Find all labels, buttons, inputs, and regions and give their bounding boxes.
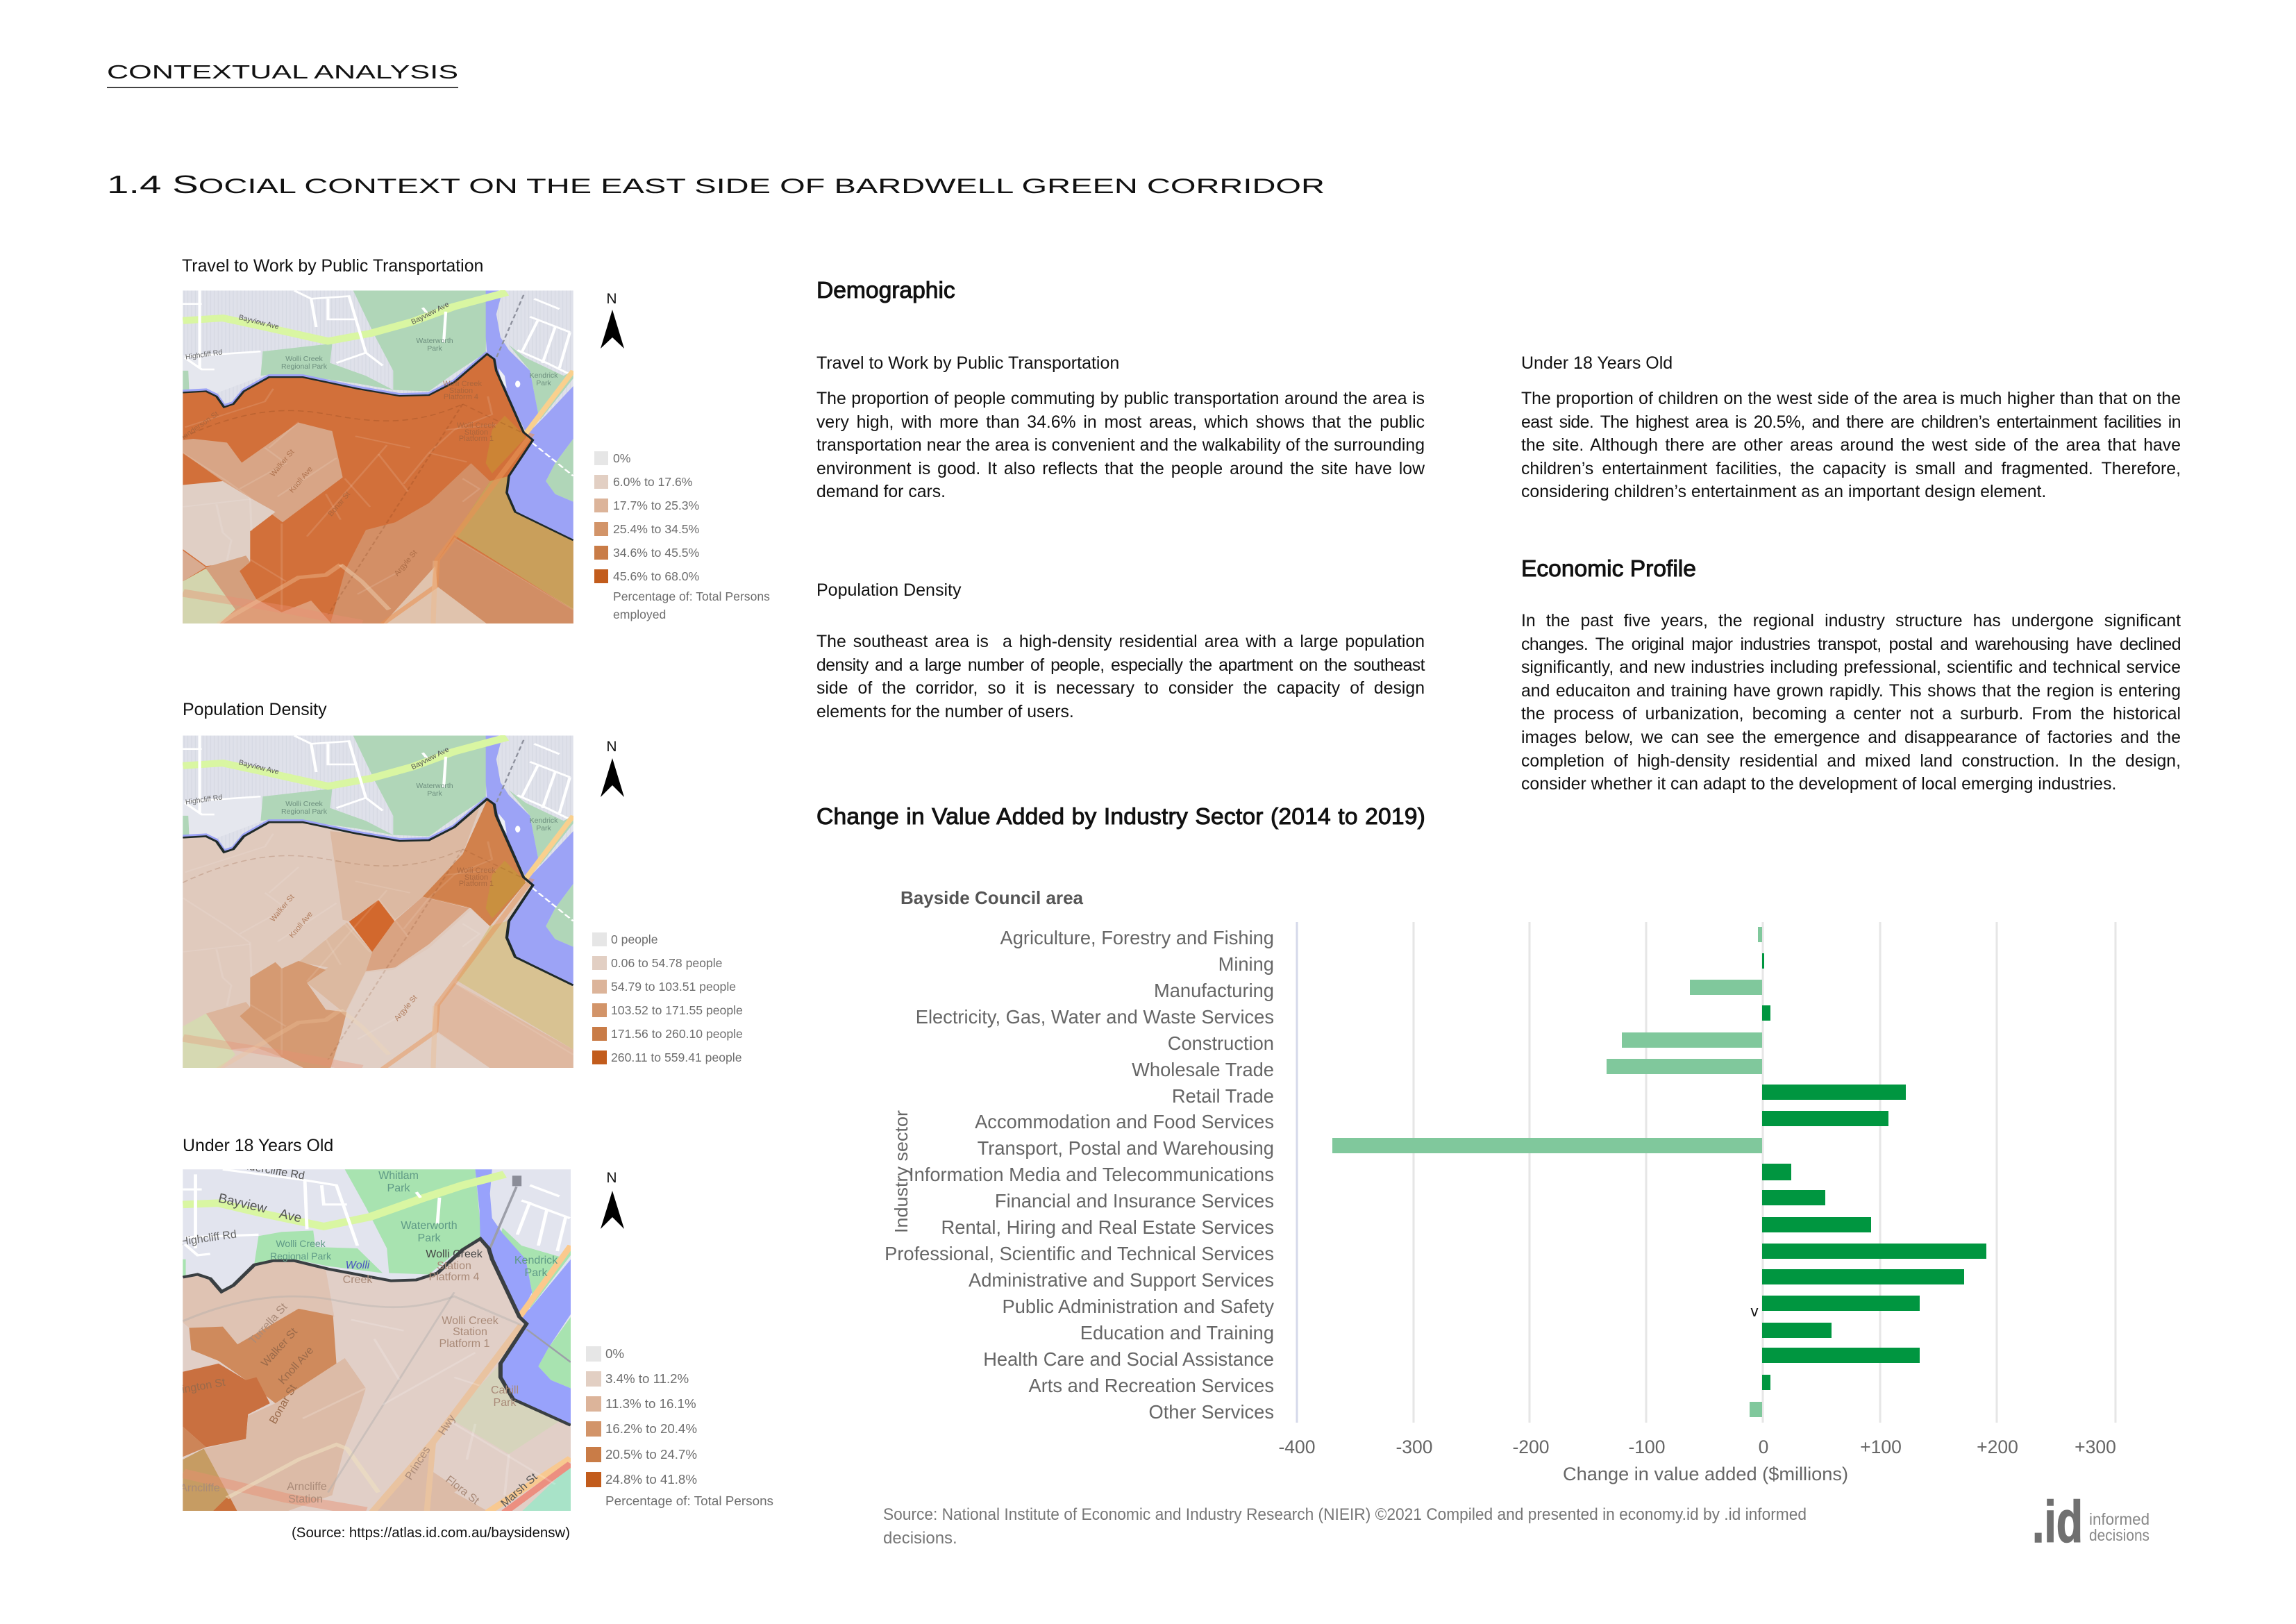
paragraph: economic profile: and educaiton and training have grown rapidly. This shows that the region is entering [1521, 682, 2181, 701]
choropleth map: under 18 years old: Marsh St [499, 1471, 540, 1509]
paragraph: travel to work: demand for cars. [816, 483, 946, 501]
logo: .id informed decisions [2032, 1489, 2150, 1555]
choropleth map: population density: Kendrick [530, 817, 558, 825]
choropleth map: population density [183, 735, 573, 1069]
panel: population density map [183, 700, 743, 1069]
choropleth map: travel to work: Walker St [269, 448, 296, 478]
negative bars [1332, 927, 1762, 1417]
choropleth map: under 18 years old: Regional Park [270, 1250, 332, 1262]
paragraph: travel to work [816, 390, 1425, 501]
choropleth map: under 18 years old: Undercliffe Rd [235, 1158, 305, 1182]
section label: contextual analysis: CONTEXTUAL ANALYSIS [107, 61, 458, 83]
legend: population density: 171.56 to 260.10 people [611, 1027, 743, 1041]
choropleth map: population density: Wolli Creek [457, 867, 496, 875]
choropleth map: travel to work: Platform 1 [459, 435, 494, 443]
paragraph: economic profile: images below, we can see the emergence and disappearance of factories and the [1521, 728, 2181, 747]
choropleth map: under 18 years old: Walker St [259, 1325, 300, 1369]
choropleth map: population density: Bayview Ave [237, 758, 280, 776]
north arrow [601, 739, 624, 797]
choropleth map: under 18 years old: Station [437, 1260, 471, 1272]
choropleth map: under 18 years old: Wolli [346, 1259, 370, 1271]
choropleth map: under 18 years old: Cahill [491, 1384, 519, 1396]
chart source note: decisions. [883, 1529, 957, 1548]
subheading: under 18 years old: Under 18 Years Old [1521, 353, 1673, 373]
north arrow [601, 291, 624, 349]
industry labels: Transport, Postal and Warehousing [978, 1137, 1274, 1159]
positive bars [1762, 953, 1986, 1390]
x axis labels: -300 [1396, 1437, 1433, 1457]
subheading: population density: Population Density [816, 580, 961, 600]
paragraph: population density [816, 633, 1425, 721]
map source note: (Source: https://atlas.id.com.au/baysidensw) [292, 1525, 570, 1541]
choropleth map: under 18 years old: Park [387, 1182, 410, 1194]
x axis labels: +300 [2075, 1437, 2116, 1457]
choropleth map: travel to work: Waterworth [416, 337, 453, 345]
choropleth map: population density: Platform 1 [459, 880, 494, 888]
industry labels: Construction [1168, 1032, 1274, 1054]
industry labels: Other Services [1148, 1401, 1274, 1423]
x axis labels: +100 [1860, 1437, 1902, 1457]
subheading: travel to work: Travel to Work by Public Transportation [816, 353, 1119, 373]
choropleth map: under 18 years old: Wolli Creek [442, 1315, 499, 1327]
paragraph: under 18 years old: considering children’s entertainment as an important design element. [1521, 483, 2046, 501]
choropleth map: under 18 years old [180, 1158, 571, 1512]
choropleth map: under 18 years old: ington St [181, 1377, 226, 1396]
choropleth map: under 18 years old: Waterworth [401, 1220, 458, 1232]
choropleth map: population density: Argyle St [393, 994, 419, 1023]
paragraph: under 18 years old: the site. Although there are other areas around the west side of the area that have [1521, 436, 2181, 455]
chart source note: Source: National Institute of Economic and Industry Research (NIEIR) ©2021 Compiled and presented in economy.id by .id informed [883, 1505, 1807, 1524]
panel: travel to work map [177, 256, 770, 624]
legend: under 18 years old: Percentage of: Total Persons [605, 1493, 773, 1508]
choropleth map: population density: Park [536, 824, 552, 832]
paragraph: economic profile: consider whether it can adapt to the development of local emerging industries. [1521, 775, 2116, 794]
choropleth map: under 18 years old: Arncliffe [287, 1481, 327, 1493]
choropleth map: travel to work: Park [427, 344, 443, 353]
legend: travel to work: 25.4% to 34.5% [613, 522, 700, 536]
stray letter v: v [1751, 1303, 1758, 1320]
legend: under 18 years old: 20.5% to 24.7% [605, 1447, 697, 1462]
legend: travel to work: 34.6% to 45.5% [613, 546, 700, 560]
grid lines [1297, 922, 2115, 1423]
legend: under 18 years old: 16.2% to 20.4% [605, 1421, 697, 1436]
legend: under 18 years old [586, 1346, 773, 1508]
choropleth map: population density: Park [427, 789, 443, 798]
paragraph: travel to work: environment is good. It also reflects that the people around the site have low [816, 460, 1425, 478]
legend: under 18 years old: 0% [605, 1346, 624, 1361]
choropleth map: under 18 years old: Park [525, 1267, 548, 1279]
map heading: population density: Population Density [183, 700, 327, 719]
choropleth map: population density: Regional Park [281, 807, 328, 816]
industry labels: Wholesale Trade [1132, 1059, 1274, 1080]
industry labels: Mining [1218, 953, 1274, 975]
industry labels: Arts and Recreation Services [1029, 1375, 1274, 1396]
choropleth map: travel to work: Henderson St [177, 410, 220, 444]
heading: economic profile: Economic Profile [1521, 556, 1696, 582]
industry labels: Administrative and Support Services [969, 1269, 1274, 1291]
paragraph: population density: The southeast area is a high-density residential area with a large population [816, 633, 1425, 651]
choropleth map: under 18 years old: Platform 1 [439, 1338, 490, 1350]
choropleth map: under 18 years old: Creek [343, 1274, 373, 1286]
choropleth map: under 18 years old: Flora St [443, 1474, 482, 1507]
industry labels: Manufacturing [1154, 980, 1274, 1001]
choropleth map: under 18 years old: Bonar St [267, 1382, 299, 1426]
logo: .id informed decisions: decisions [2089, 1526, 2150, 1544]
choropleth map: travel to work: Highcliff Rd [185, 348, 223, 362]
industry labels [885, 927, 1274, 1423]
legend: population density: 0.06 to 54.78 people [611, 956, 722, 970]
industry labels: Information Media and Telecommunications [909, 1164, 1274, 1185]
industry labels: Rental, Hiring and Real Estate Services [941, 1216, 1274, 1238]
logo: .id informed decisions: .id [2032, 1489, 2083, 1555]
choropleth map: travel to work: Kendrick [530, 371, 558, 380]
y axis title: Industry sector [891, 1110, 912, 1233]
paragraph: travel to work: transportation near the area is convenient and the walkability of the surrounding [816, 436, 1425, 455]
paragraph: economic profile: completion of high-density residential and mixed land construction. In the design, [1521, 752, 2181, 771]
choropleth map: under 18 years old: Highcliff Rd [180, 1228, 237, 1248]
panel: under 18 years old map [180, 1136, 773, 1541]
industry labels: Electricity, Gas, Water and Waste Services [916, 1006, 1274, 1028]
paragraph: economic profile [1521, 612, 2181, 794]
choropleth map: population density: Highcliff Rd [185, 793, 223, 807]
choropleth map: travel to work: Wolli Creek [285, 355, 323, 363]
choropleth map: travel to work: Bayview Ave [237, 313, 280, 331]
paragraph: population density: elements for the number of users. [816, 703, 1074, 721]
legend: travel to work: 17.7% to 25.3% [613, 499, 700, 512]
paragraph: economic profile: In the past five years, the regional industry structure has undergone significant [1521, 612, 2181, 630]
choropleth map: travel to work: Argyle St [393, 549, 419, 578]
choropleth map: under 18 years old: Arncliffe [180, 1482, 220, 1494]
x axis labels: 0 [1759, 1437, 1768, 1457]
choropleth map: under 18 years old: Wolli Creek [276, 1238, 326, 1249]
industry labels: Education and Training [1080, 1322, 1274, 1343]
legend: under 18 years old: 24.8% to 41.8% [605, 1472, 697, 1487]
legend: population density: 260.11 to 559.41 people [611, 1050, 741, 1064]
chart source note [883, 1505, 1807, 1548]
choropleth map: under 18 years old: Station [288, 1493, 323, 1505]
choropleth map: under 18 years old: Bayview [217, 1191, 268, 1216]
choropleth map: under 18 years old: Whitlam [378, 1170, 419, 1182]
north arrow [601, 1170, 624, 1229]
legend: population density: 103.52 to 171.55 people [611, 1003, 743, 1017]
paragraph: under 18 years old [1521, 390, 2181, 501]
bar chart: change in value added by industry sector [883, 887, 2150, 1555]
industry labels: Accommodation and Food Services [975, 1111, 1274, 1132]
paragraph: travel to work: very high, with more than 34.6% in most areas, which shows that the public [816, 413, 1425, 432]
legend: population density: 0 people [611, 932, 658, 946]
chart title: bayside council area: Bayside Council area [900, 887, 1084, 908]
x axis labels: +200 [1977, 1437, 2018, 1457]
north arrow: N [606, 739, 617, 755]
paragraph: under 18 years old: children’s entertainment facilities, the capacity is small and fragmented. Therefore, [1521, 460, 2181, 478]
legend: under 18 years old: 3.4% to 11.2% [605, 1371, 689, 1386]
legend: travel to work: Percentage of: Total Persons [613, 589, 770, 603]
choropleth map: travel to work: Station [449, 387, 473, 395]
choropleth map: travel to work: Wolli Creek [457, 421, 496, 430]
choropleth map: under 18 years old: Station [453, 1326, 487, 1338]
x axis labels: -400 [1278, 1437, 1316, 1457]
choropleth map: travel to work: Station [464, 428, 488, 437]
choropleth map: population density: Walker St [269, 893, 296, 923]
choropleth map: travel to work: Bayview Ave [410, 300, 451, 326]
choropleth map: under 18 years old: Turrella St [247, 1301, 290, 1347]
industry labels: Professional, Scientific and Technical Services [885, 1243, 1274, 1264]
choropleth map: travel to work: Bonar St [326, 490, 352, 518]
choropleth map: population density: Bayview Ave [410, 745, 451, 771]
x axis labels [1278, 1437, 2116, 1457]
choropleth map: travel to work: Knoll Ave [287, 465, 315, 494]
legend: travel to work [594, 451, 770, 621]
logo: .id informed decisions: informed [2089, 1510, 2150, 1528]
choropleth map: population density: Station [464, 873, 488, 882]
choropleth map: under 18 years old: Princes [403, 1444, 433, 1482]
choropleth map: population density: Wolli Creek [285, 800, 323, 808]
x axis title: Change in value added ($millions) [1563, 1464, 1848, 1484]
industry labels: Financial and Insurance Services [995, 1190, 1274, 1212]
paragraph: economic profile: changes. The original major industries transpot, postal and warehousing have declined [1521, 635, 2181, 654]
choropleth map: under 18 years old: Kendrick [514, 1255, 558, 1266]
choropleth map: population density: Knoll Ave [287, 910, 315, 939]
paragraph: population density: side of the corridor, so it is necessary to consider the capacity of design [816, 679, 1425, 698]
choropleth map: travel to work: Platform 4 [444, 393, 478, 401]
legend: travel to work: employed [613, 608, 666, 621]
paragraph: under 18 years old: The proportion of children on the west side of the area is much higher than that on the [1521, 390, 2181, 408]
choropleth map: under 18 years old: Knoll Ave [276, 1345, 316, 1387]
choropleth map: under 18 years old: Ave [278, 1207, 303, 1226]
legend: travel to work: 6.0% to 17.6% [613, 475, 693, 489]
choropleth map: under 18 years old: Park [418, 1232, 441, 1244]
north arrow: N [606, 291, 617, 307]
choropleth map: travel to work: Regional Park [281, 362, 328, 371]
heading: demographic: Demographic [816, 278, 955, 303]
choropleth map: travel to work: Wolli Creek [443, 380, 483, 388]
paragraph: population density: density and a large number of people, especially the apartment on the southeast [816, 656, 1425, 675]
choropleth map: population density: Waterworth [416, 782, 453, 790]
map heading: under 18 years old: Under 18 Years Old [183, 1136, 333, 1155]
x axis labels: -200 [1512, 1437, 1550, 1457]
paragraph: economic profile: the process of urbanization, becoming a center not a surburb. From the historical [1521, 705, 2181, 723]
choropleth map: under 18 years old: Wolli Creek [426, 1248, 483, 1260]
choropleth map: under 18 years old: Hwy [437, 1413, 458, 1437]
x axis labels: -100 [1628, 1437, 1666, 1457]
industry labels: Agriculture, Forestry and Fishing [1000, 927, 1274, 948]
industry labels: Public Administration and Safety [1003, 1296, 1274, 1317]
north arrow: N [606, 1170, 617, 1186]
legend: population density: 54.79 to 103.51 people [611, 980, 736, 994]
heading: change in value added: Change in Value Added by Industry Sector (2014 to 2019) [816, 804, 1425, 830]
choropleth map: under 18 years old: Platform 4 [429, 1271, 480, 1283]
choropleth map: travel to work: Park [536, 379, 552, 387]
map heading: travel to work: Travel to Work by Public Transportation [182, 256, 483, 276]
legend: travel to work: 0% [613, 451, 631, 465]
legend: population density [592, 932, 743, 1064]
paragraph: economic profile: significantly, and new industries including prefessional, scientific and technical service [1521, 658, 2181, 677]
choropleth map: travel to work [177, 290, 573, 624]
choropleth map: under 18 years old: Park [494, 1397, 517, 1409]
page title: 1.4 S OCIAL CONTEXT ON THE EAST SIDE OF BARDWELL GREEN CORRIDOR [107, 170, 1325, 199]
legend: travel to work: 45.6% to 68.0% [613, 569, 700, 583]
industry labels: Retail Trade [1172, 1085, 1274, 1107]
industry labels: Health Care and Social Assistance [983, 1348, 1274, 1370]
paragraph: under 18 years old: east side. The highest area is 20.5%, and there are children’s entertainment facilities in [1521, 413, 2181, 432]
paragraph: travel to work: The proportion of people commuting by public transportation around the area is [816, 390, 1425, 408]
legend: under 18 years old: 11.3% to 16.1% [605, 1396, 696, 1411]
